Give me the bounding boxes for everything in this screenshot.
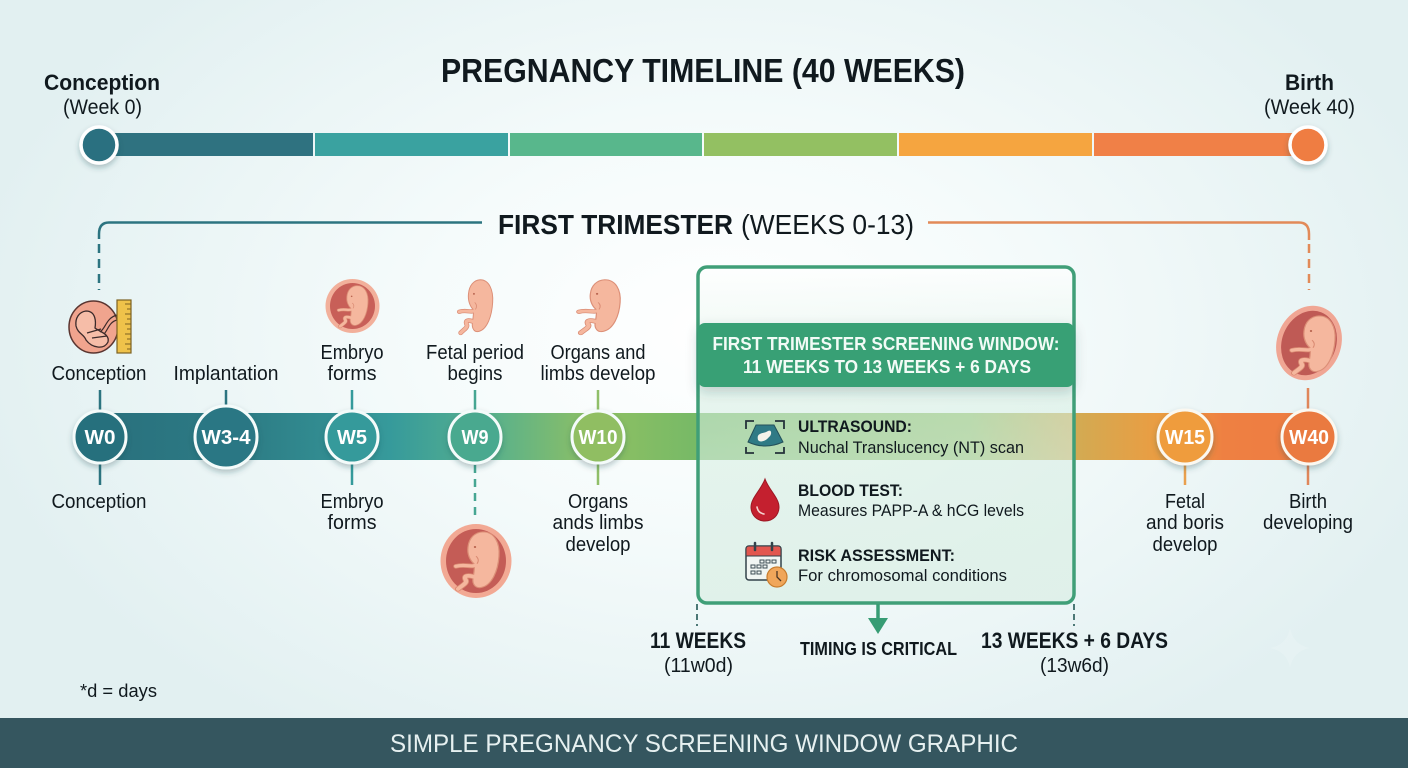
label: embryo forms — [320, 342, 384, 385]
label: organs ands limbs develop lower: develop — [566, 534, 630, 556]
ultrasound text — [798, 417, 1024, 457]
label: embryo forms lower — [320, 491, 384, 534]
window header: FIRST TRIMESTER SCREENING WINDOW: — [712, 334, 1060, 354]
risk assessment text — [798, 546, 1007, 585]
label: fetal and boris develop: develop — [1152, 534, 1218, 556]
label: organs ands limbs develop lower: ands limbs — [552, 512, 644, 534]
first trimester bracket: right — [928, 222, 1309, 290]
label: embryo forms: forms — [328, 363, 376, 385]
icon: embryo, week 9 upper — [459, 280, 493, 333]
end label: birth — [1264, 70, 1355, 119]
label: embryo forms: Embryo — [320, 342, 384, 364]
footnote: *d = days — [80, 681, 157, 701]
blood test text: Measures PAPP-A & hCG levels — [798, 501, 1024, 520]
label: birth developing: Birth — [1289, 491, 1327, 513]
label: embryo forms lower: Embryo — [320, 491, 384, 513]
marker W10: W10 — [578, 427, 618, 449]
risk assessment text: RISK ASSESSMENT: — [798, 546, 955, 565]
icon: embryo in womb, week 40 — [1265, 296, 1353, 390]
40-week overview bar — [81, 127, 1326, 163]
label: organs ands limbs develop lower — [552, 491, 644, 556]
marker W5: W5 — [337, 427, 367, 449]
start label: conception: (Week 0) — [63, 96, 142, 119]
marker W40: W40 — [1289, 427, 1329, 449]
label: organs ands limbs develop lower: Organs — [568, 491, 628, 513]
icon: blood drop — [751, 479, 779, 521]
label: 11 weeks — [650, 628, 746, 677]
label: conception: Conception — [52, 363, 146, 385]
icon: embryo with ruler, conception — [69, 300, 131, 353]
screening window panel — [698, 267, 1074, 603]
window header: 11 WEEKS TO 13 WEEKS + 6 DAYS — [743, 357, 1031, 377]
marker W0 — [74, 411, 126, 463]
label: organs and limbs develop: limbs develop — [540, 363, 656, 385]
icon: embryo in womb, week 9 lower — [440, 524, 512, 598]
ultrasound text: Nuchal Translucency (NT) scan — [798, 438, 1024, 457]
marker W15: W15 — [1165, 427, 1205, 449]
window range dashes — [697, 604, 1074, 626]
connector ticks — [100, 388, 1308, 518]
marker W5 — [326, 411, 378, 463]
labels above the track — [52, 342, 656, 385]
first trimester heading — [498, 209, 914, 240]
label: fetal period begins: Fetal period — [426, 342, 524, 364]
marker W0: W0 — [84, 427, 116, 449]
arrow: timing — [868, 604, 888, 634]
icon: embryo, week 10 upper — [579, 280, 620, 333]
label: 11 weeks: 11 WEEKS — [650, 628, 746, 653]
label: birth developing: developing — [1263, 512, 1353, 534]
marker W3-4 — [195, 406, 257, 468]
marker W3-4: W3-4 — [202, 427, 251, 449]
label: implantation: Implantation — [174, 363, 278, 385]
label: embryo forms lower: forms — [328, 512, 376, 534]
window header — [698, 323, 1074, 387]
first trimester heading: (WEEKS 0-13) — [741, 209, 914, 240]
risk assessment text: For chromosomal conditions — [798, 566, 1007, 585]
label: timing is critical: TIMING IS CRITICAL — [800, 639, 957, 659]
label: 13 weeks + 6 days — [981, 628, 1168, 677]
icon: ultrasound — [746, 421, 784, 453]
label: fetal and boris develop: Fetal — [1165, 491, 1205, 513]
first trimester heading: FIRST TRIMESTER — [498, 209, 733, 240]
footer band — [0, 718, 1408, 768]
week markers — [74, 406, 1336, 468]
labels below the track — [52, 491, 1353, 556]
marker W9 — [449, 411, 501, 463]
blood test text — [798, 481, 1024, 520]
label: 13 weeks + 6 days: (13w6d) — [1040, 655, 1109, 677]
main timeline track — [100, 413, 1308, 460]
marker W10 — [572, 411, 624, 463]
marker W9: W9 — [462, 427, 488, 449]
label: organs and limbs develop — [540, 342, 656, 385]
first trimester bracket: left — [99, 222, 482, 290]
blood test text: BLOOD TEST: — [798, 481, 903, 500]
end label: birth: Birth — [1285, 70, 1334, 95]
marker W15 — [1158, 410, 1212, 464]
decorative sparkle — [1270, 628, 1310, 668]
label: fetal and boris develop — [1146, 491, 1224, 556]
label: 11 weeks: (11w0d) — [664, 655, 733, 677]
start label: conception — [44, 70, 160, 119]
label: conception lower: Conception — [52, 491, 146, 513]
label: birth developing — [1263, 491, 1353, 534]
label: fetal period begins — [426, 342, 524, 385]
label: fetal and boris develop: and boris — [1146, 512, 1224, 534]
label: organs and limbs develop: Organs and — [550, 342, 646, 364]
label: fetal period begins: begins — [448, 363, 502, 385]
marker W40 — [1282, 410, 1336, 464]
icon: embryo in circle, week 5 — [326, 279, 380, 333]
start label: conception: Conception — [44, 70, 160, 95]
label: 13 weeks + 6 days: 13 WEEKS + 6 DAYS — [981, 628, 1168, 653]
icon: calendar with clock — [746, 543, 787, 587]
title: PREGNANCY TIMELINE (40 WEEKS) — [441, 52, 965, 89]
end label: birth: (Week 40) — [1264, 96, 1355, 119]
footer band: SIMPLE PREGNANCY SCREENING WINDOW GRAPHIC — [390, 730, 1018, 758]
ultrasound text: ULTRASOUND: — [798, 417, 912, 436]
